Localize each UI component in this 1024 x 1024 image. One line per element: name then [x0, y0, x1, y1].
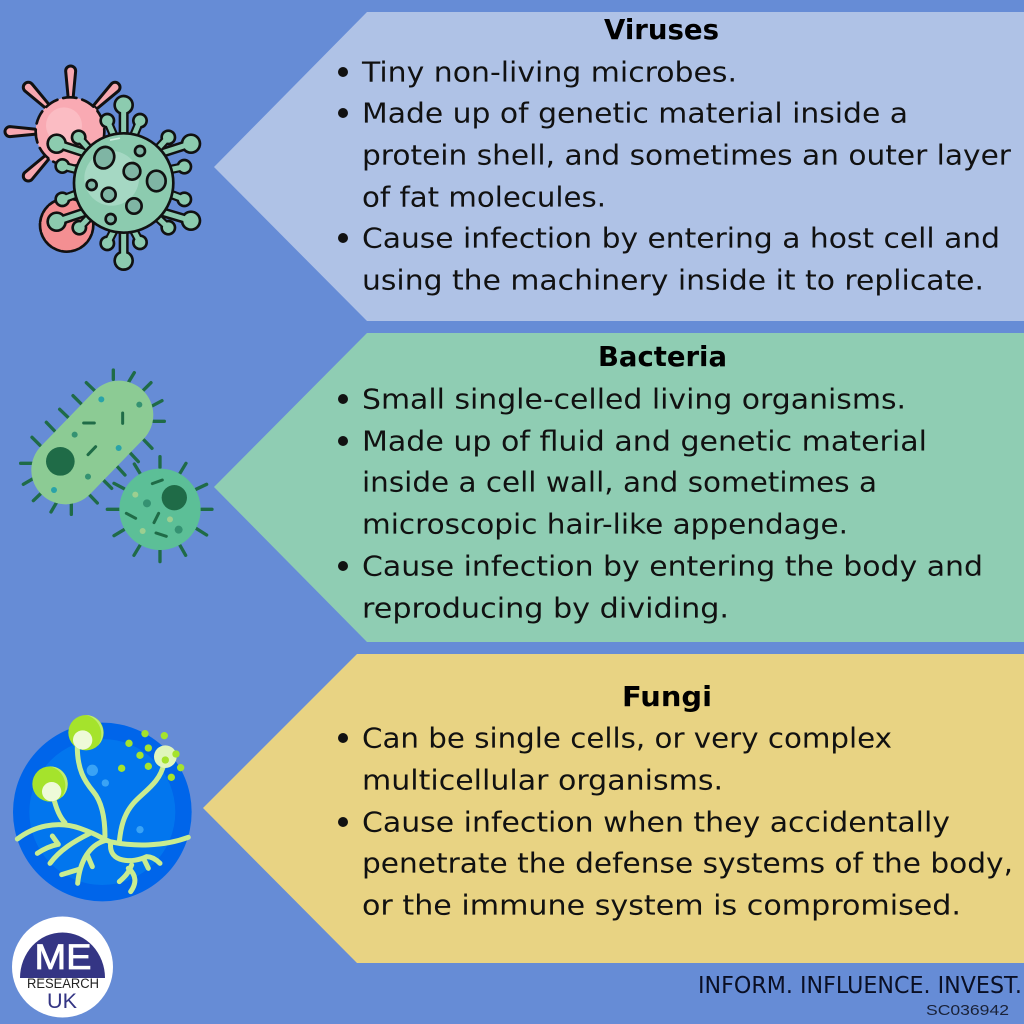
rod bacterium	[66, 415, 119, 470]
icon: virus	[5, 66, 201, 271]
logo: ME Research UK	[12, 916, 113, 1018]
text block: viruses bullets: of fat molecules.	[362, 180, 606, 214]
footer: charity number: SC036942	[926, 1002, 1009, 1019]
text block: bacteria bullets: Cause infection by entering the body and	[362, 550, 983, 582]
green virus body	[74, 133, 173, 233]
text block: viruses bullets: protein shell, and sometimes an outer layer	[362, 138, 1012, 172]
text block: fungi bullets: multicellular organisms.	[362, 764, 723, 796]
text block: bacteria bullets: inside a cell wall, and sometimes a	[362, 466, 877, 498]
text block: fungi bullets: Can be single cells, or very complex	[362, 722, 892, 754]
panel: fungi	[203, 654, 1024, 963]
text block: viruses bullets	[338, 56, 1012, 296]
spores	[118, 730, 184, 781]
icon: fungi	[13, 715, 192, 901]
text block: viruses bullets: Tiny non-living microbes.	[361, 56, 737, 88]
text block: bacteria bullets: Made up of fluid and genetic material	[362, 424, 927, 458]
heading: fungi: Fungi	[622, 680, 712, 713]
panel: bacteria	[214, 333, 1024, 642]
green virus pits	[87, 144, 166, 224]
text block: viruses bullets: Cause infection by entering a host cell and	[362, 222, 1000, 254]
hyphae	[17, 743, 188, 892]
text block: viruses bullets: using the machinery inside it to replicate.	[362, 264, 984, 296]
bubbles	[87, 765, 144, 833]
text block: bacteria bullets: Small single-celled living organisms.	[362, 382, 906, 416]
logo: ME Research UK: RESEARCH	[27, 976, 99, 991]
text block: bacteria bullets	[338, 382, 983, 624]
panel: viruses	[214, 12, 1024, 321]
pink virus body	[36, 97, 104, 166]
logo: ME Research UK: ME	[34, 938, 92, 977]
text block: fungi bullets	[338, 722, 1013, 922]
round bacterium	[119, 469, 201, 550]
nuclei and dots	[46, 396, 187, 536]
red virus body	[40, 198, 93, 252]
icon: bacteria	[21, 370, 212, 562]
footer: tagline: INFORM. INFLUENCE. INVEST.	[698, 973, 1022, 999]
logo: ME Research UK: UK	[47, 990, 77, 1013]
pink virus spikes	[5, 66, 122, 183]
heading: viruses: Viruses	[604, 13, 719, 46]
heading: bacteria: Bacteria	[598, 340, 727, 373]
bacteria spines	[21, 370, 212, 562]
text block: bacteria bullets: reproducing by dividing.	[362, 592, 729, 624]
spore heads	[32, 715, 177, 802]
text block: fungi bullets: Cause infection when they accidentally	[362, 806, 950, 838]
text block: viruses bullets: Made up of genetic material inside a	[362, 96, 908, 130]
green virus spikes	[46, 95, 201, 271]
text block: fungi bullets: penetrate the defense systems of the body,	[362, 846, 1013, 880]
text block: fungi bullets: or the immune system is compromised.	[362, 888, 961, 922]
text block: bacteria bullets: microscopic hair-like appendage.	[362, 508, 848, 540]
fungi disc	[13, 723, 192, 901]
